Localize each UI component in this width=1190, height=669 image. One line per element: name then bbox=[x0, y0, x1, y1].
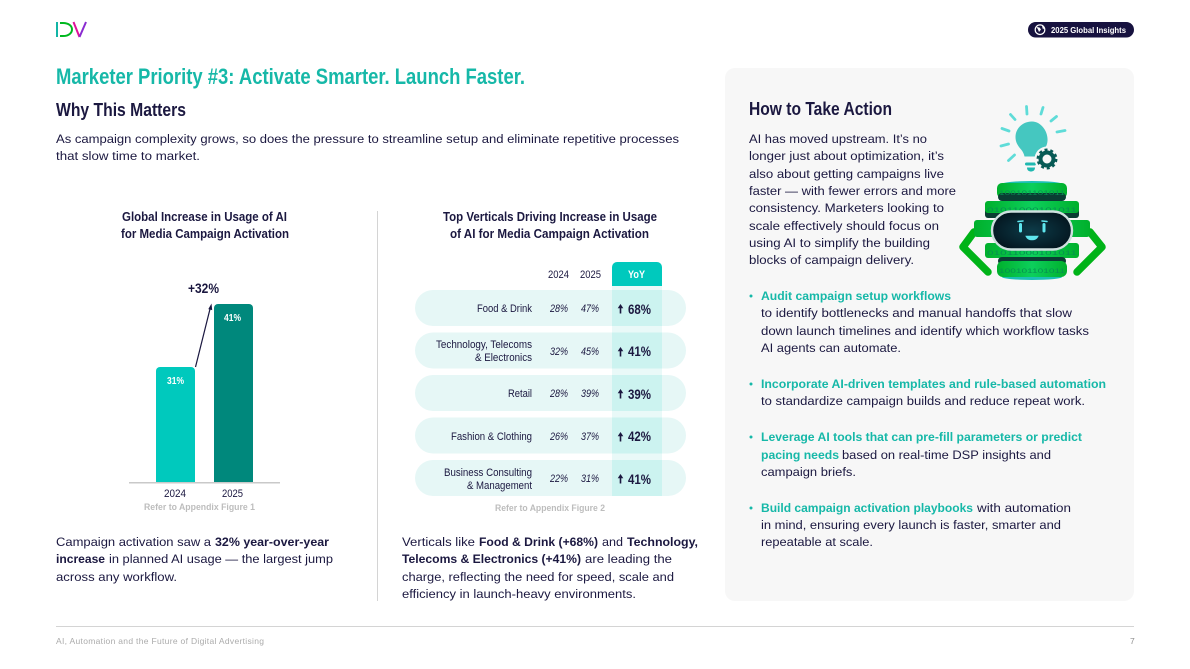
bar chart: AI usage 2024 vs 2025: 2024 bbox=[164, 488, 186, 500]
panel intro text: scale effectively should focus on bbox=[749, 219, 939, 233]
bar chart: AI usage 2024 vs 2025: Refer to Appendix Figure 1 bbox=[144, 502, 255, 512]
row: technology bbox=[436, 339, 651, 364]
bullet: leverage AI tools: Leverage AI tools that can pre-fill parameters or predict bbox=[761, 430, 1082, 444]
row: technology: 41% bbox=[628, 343, 651, 359]
row: business consulting: 41% bbox=[628, 471, 651, 487]
bullet: audit campaign setup workflows bbox=[750, 289, 1089, 355]
text: campaign activation summary: across any workflow. bbox=[56, 570, 177, 584]
chart heading: top verticals: of AI for Media Campaign Activation bbox=[450, 227, 649, 241]
text: campaign activation summary bbox=[56, 535, 333, 584]
panel intro text: also about getting campaigns live bbox=[749, 167, 944, 181]
text: verticals summary bbox=[402, 535, 698, 601]
text: campaign activation summary: 32% year-over-year bbox=[215, 535, 329, 549]
panel intro text: longer just about optimization, it’s bbox=[749, 149, 944, 163]
text: verticals summary: are leading the bbox=[585, 552, 672, 566]
panel: how to take action bbox=[725, 68, 1134, 601]
panel intro text bbox=[749, 132, 956, 267]
text: verticals summary: Technology, bbox=[627, 535, 698, 549]
bullet: activation playbooks: with automation bbox=[976, 501, 1071, 515]
chart heading: top verticals: Top Verticals Driving Increase in Usage bbox=[443, 210, 657, 224]
bullet: audit campaign setup workflows: to identify bottlenecks and manual handoffs that slow bbox=[761, 306, 1072, 320]
bullet: leverage AI tools bbox=[750, 430, 1082, 479]
text: verticals summary: and bbox=[602, 535, 623, 549]
row: business consulting: 31% bbox=[581, 473, 599, 485]
row: food and drink bbox=[477, 301, 651, 317]
icon: robot: 01011000101011 bbox=[987, 207, 1078, 214]
panel intro text: blocks of campaign delivery. bbox=[749, 253, 914, 267]
row: fashion bbox=[451, 428, 651, 444]
table: top verticals: 2024 bbox=[548, 269, 569, 281]
footer: AI, Automation and the Future of Digital Advertising bbox=[56, 636, 264, 646]
table: top verticals bbox=[415, 262, 686, 513]
row: food and drink: 28% bbox=[549, 303, 568, 315]
row: fashion: 37% bbox=[581, 431, 599, 443]
bullet: leverage AI tools: campaign briefs. bbox=[761, 465, 856, 479]
row: business consulting: 22% bbox=[549, 473, 568, 485]
panel intro text: consistency. Marketers looking to bbox=[749, 201, 944, 215]
text: campaign activation summary: in planned AI usage — the largest jump bbox=[109, 552, 333, 566]
row: technology: 32% bbox=[550, 346, 568, 358]
row: fashion: 26% bbox=[549, 431, 568, 443]
row: technology: Technology, Telecoms bbox=[436, 339, 532, 351]
bullet: activation playbooks: repeatable at scale. bbox=[761, 535, 873, 549]
badge: 2025 Global Insights: 2025 Global Insights bbox=[1051, 25, 1126, 35]
bullet: activation playbooks bbox=[750, 501, 1071, 549]
row: retail bbox=[508, 386, 651, 402]
table: top verticals: Refer to Appendix Figure 2 bbox=[495, 503, 605, 513]
title: Marketer Priority #3: Activate Smarter. Launch Faster. bbox=[56, 64, 525, 89]
bullet: activation playbooks: in mind, ensuring every launch is faster, smarter and bbox=[761, 518, 1061, 532]
text: verticals summary: Telecoms & Electronics (+41%) bbox=[402, 552, 581, 566]
icon: robot bbox=[963, 181, 1102, 280]
row: food and drink: 47% bbox=[581, 303, 599, 315]
bullet: audit campaign setup workflows: Audit campaign setup workflows bbox=[761, 289, 951, 303]
row: technology: 45% bbox=[581, 346, 599, 358]
chart heading: global increase bbox=[121, 210, 289, 241]
row: food and drink: Food & Drink bbox=[477, 303, 532, 315]
table: top verticals: 2025 bbox=[580, 269, 601, 281]
bar chart: AI usage 2024 vs 2025: 2025 bbox=[222, 488, 243, 500]
bar chart: AI usage 2024 vs 2025: 31% bbox=[167, 376, 184, 387]
row: retail: 28% bbox=[549, 388, 568, 400]
row: technology: & Electronics bbox=[475, 352, 532, 364]
bullet: AI-driven templates: to standardize campaign builds and reduce repeat work. bbox=[761, 394, 1085, 408]
bar chart: AI usage 2024 vs 2025: +32% bbox=[188, 280, 219, 296]
row: fashion: 42% bbox=[628, 428, 651, 444]
row: retail: 39% bbox=[581, 388, 599, 400]
bar chart: AI usage 2024 vs 2025 bbox=[129, 280, 280, 512]
text: verticals summary: efficiency in launch-heavy environments. bbox=[402, 587, 636, 601]
table: top verticals: YoY bbox=[628, 269, 646, 281]
footer: 7 bbox=[1130, 636, 1135, 646]
panel intro text: using AI to simplify the building bbox=[749, 236, 930, 250]
text: verticals summary: Food & Drink (+68%) bbox=[479, 535, 598, 549]
text: campaign activation summary: Campaign activation saw a bbox=[56, 535, 211, 549]
row: retail: 39% bbox=[628, 386, 651, 402]
intro text: As campaign complexity grows, so does the pressure to streamline setup and eliminate repetitive processes bbox=[56, 132, 679, 146]
logo: DV bbox=[57, 22, 86, 37]
heading: how to take action: How to Take Action bbox=[749, 99, 892, 119]
footer bbox=[56, 626, 1135, 646]
row: retail: Retail bbox=[508, 388, 532, 400]
bar chart: AI usage 2024 vs 2025: 41% bbox=[224, 313, 241, 324]
text: verticals summary: Verticals like bbox=[402, 535, 475, 549]
bullet: audit campaign setup workflows: down launch timelines and identify which workflow tasks bbox=[761, 324, 1089, 338]
bullet: AI-driven templates: Incorporate AI-driven templates and rule-based automation bbox=[761, 377, 1106, 391]
row: food and drink: 68% bbox=[628, 301, 651, 317]
bullet: activation playbooks: Build campaign activation playbooks bbox=[761, 501, 973, 515]
row: business consulting bbox=[444, 467, 651, 492]
row: business consulting: & Management bbox=[467, 480, 533, 492]
row: fashion: Fashion & Clothing bbox=[451, 431, 532, 443]
bullet: audit campaign setup workflows: AI agents can automate. bbox=[761, 341, 901, 355]
bullet: leverage AI tools: pacing needs bbox=[761, 448, 839, 462]
intro text bbox=[56, 132, 679, 163]
icon: robot: 01011000101011 bbox=[987, 250, 1078, 257]
chart heading: top verticals bbox=[443, 210, 657, 241]
bullet: leverage AI tools: based on real-time DSP insights and bbox=[842, 448, 1051, 462]
icon: robot: 100101101011 bbox=[999, 190, 1066, 197]
icon: lightbulb with gear bbox=[1001, 106, 1065, 172]
intro text: that slow time to market. bbox=[56, 149, 200, 163]
badge: 2025 Global Insights bbox=[1028, 22, 1134, 38]
bullet: AI-driven templates bbox=[750, 377, 1106, 408]
panel intro text: AI has moved upstream. It’s no bbox=[749, 132, 927, 146]
panel intro text: faster — with fewer errors and more bbox=[749, 184, 956, 198]
chart heading: global increase: for Media Campaign Activation bbox=[121, 227, 289, 241]
chart heading: global increase: Global Increase in Usage of AI bbox=[122, 210, 287, 224]
icon: robot: 100101101011 bbox=[999, 268, 1066, 275]
text: verticals summary: charge, reflecting the need for speed, scale and bbox=[402, 570, 674, 584]
text: campaign activation summary: increase bbox=[56, 552, 105, 566]
row: business consulting: Business Consulting bbox=[444, 467, 532, 479]
heading: why this matters: Why This Matters bbox=[56, 100, 186, 120]
